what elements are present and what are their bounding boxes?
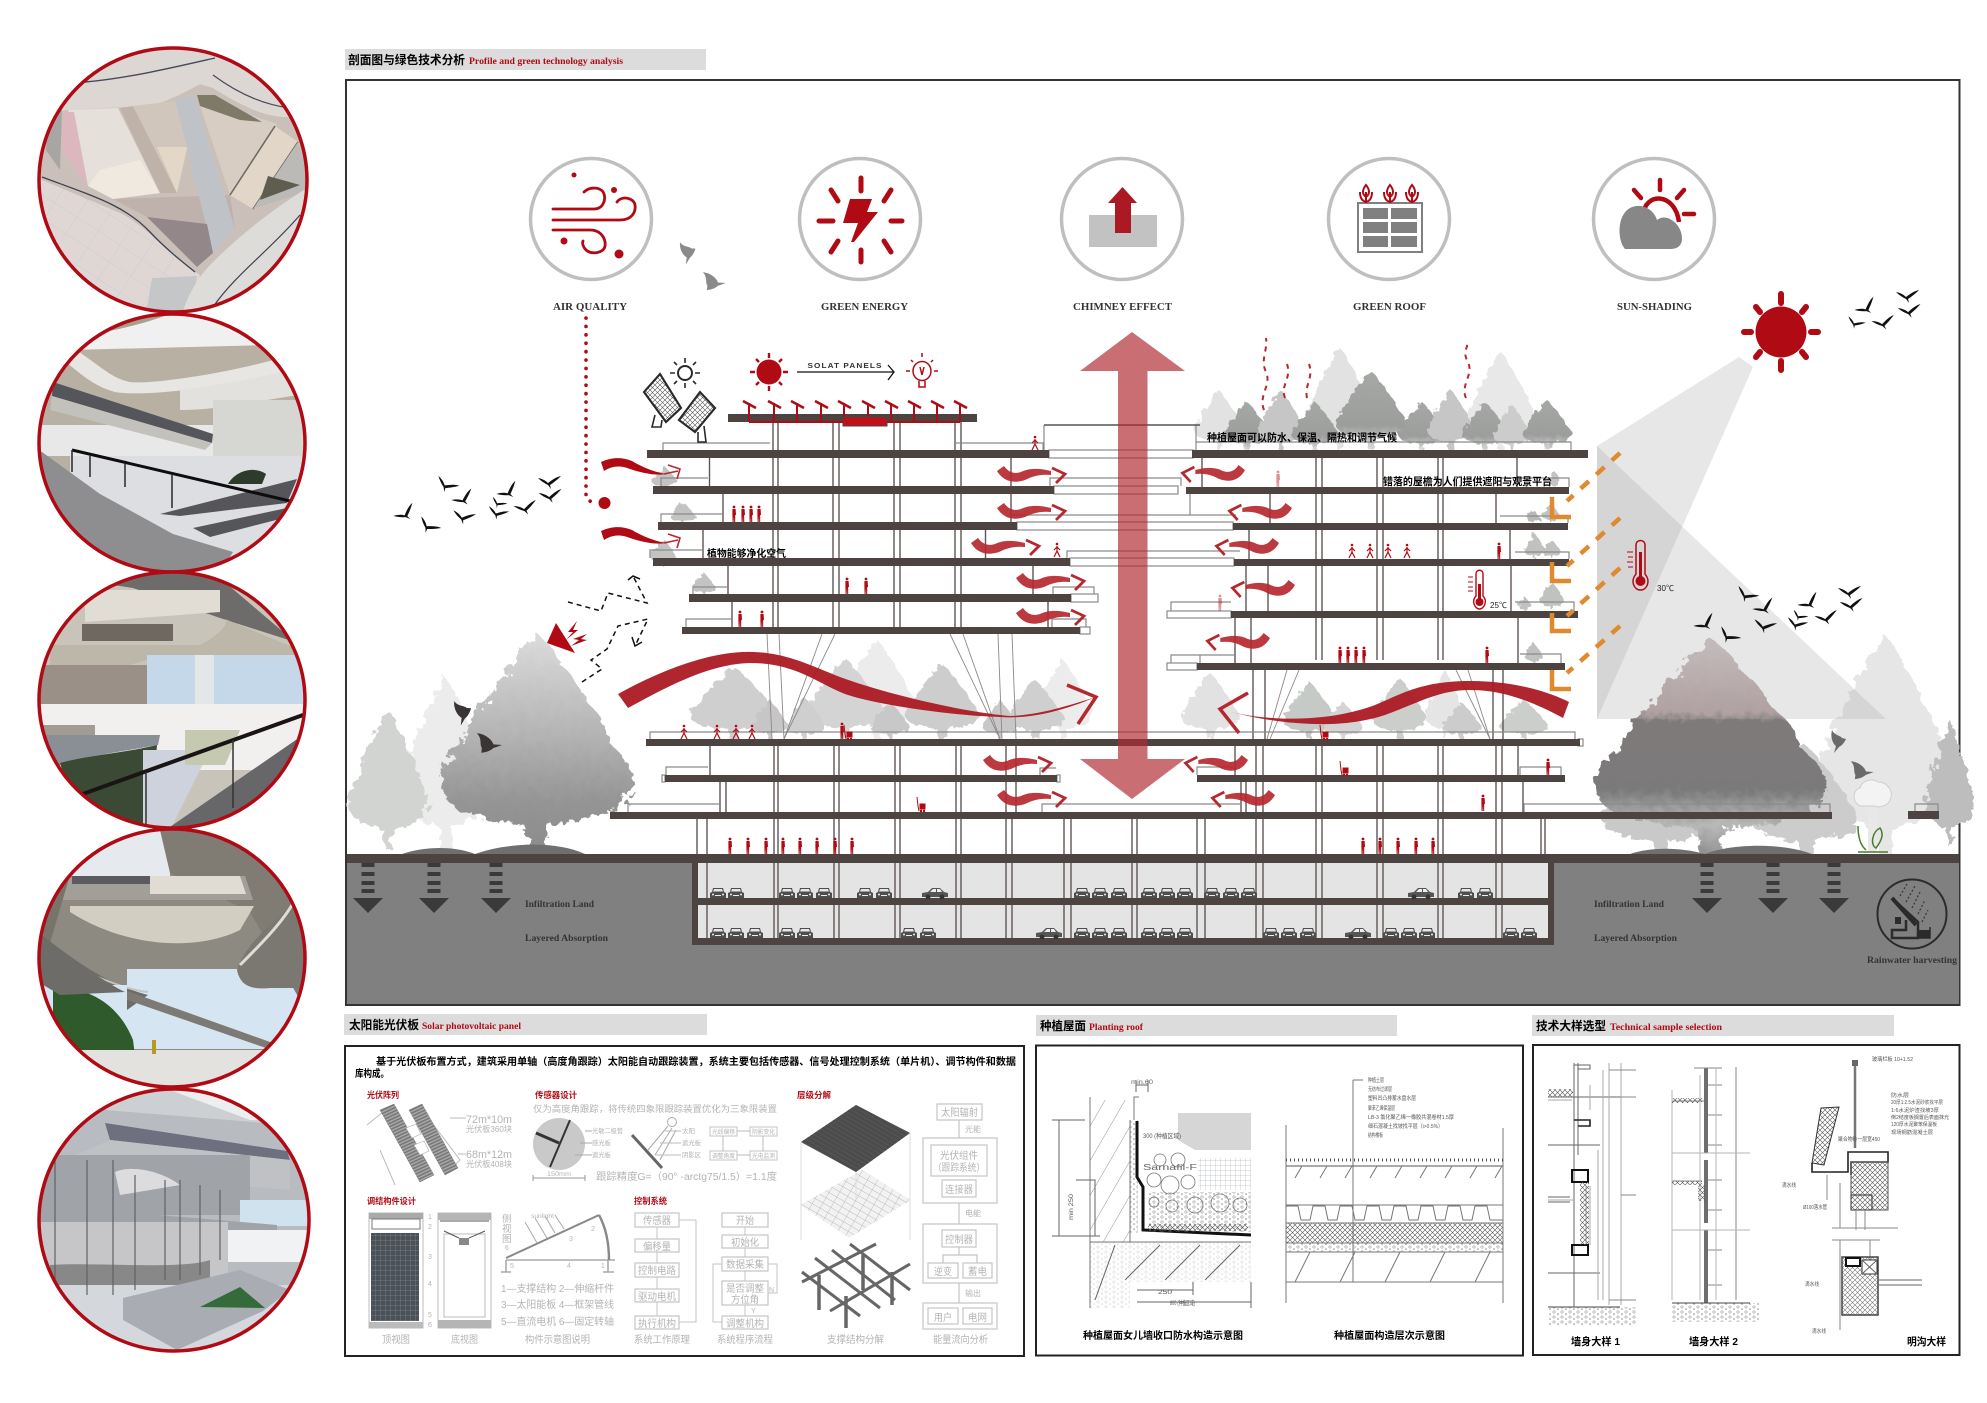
intro paragraph	[355, 1055, 1016, 1080]
solar panel captions	[382, 1333, 988, 1346]
gully detail: Ø100落水管	[1803, 1203, 1827, 1211]
chimney double arrow	[1080, 332, 1185, 799]
solar panels on roof	[743, 401, 967, 426]
sub heading: sensor design: 传感器设计	[535, 1090, 577, 1100]
solar panel captions: 能量流向分析	[933, 1333, 988, 1346]
solar panel captions: 构件示意图说明	[525, 1333, 590, 1346]
label: green energy: GREEN ENERGY	[821, 301, 908, 313]
infiltration arrows right	[1692, 863, 1849, 913]
energy flow labels	[933, 1106, 987, 1324]
section: solar panel heading: Solar photovoltaic panel	[422, 1021, 522, 1031]
dashed reflected sound arrows	[568, 576, 648, 682]
side view tracker drawing: 1	[601, 1263, 605, 1270]
sensor diagram: 感光板	[592, 1138, 611, 1147]
parapet waterproof detail: Sarnafil-F	[1143, 1163, 1197, 1172]
side view tracker drawing: 5	[510, 1263, 514, 1270]
flowchart: program flow	[713, 1213, 777, 1330]
label: rainwater harvesting: Rainwater harvesting	[1867, 956, 1957, 966]
panel part numbers: 3	[428, 1254, 432, 1261]
section: solar panel heading: 太阳能光伏板	[349, 1017, 419, 1032]
sensor note: 仅为高度角跟踪，将传统四象限跟踪装置优化为三象限装置	[533, 1103, 777, 1114]
energy flow labels: 光能	[965, 1124, 981, 1134]
panel: technical samples	[1533, 1045, 1960, 1355]
flowchart: program flow: Y	[751, 1308, 756, 1315]
technical captions: 墙身大样 1	[1571, 1335, 1620, 1348]
gully detail: 聚合物砂一层宽450	[1838, 1135, 1880, 1143]
birds: grey pigeons near icons	[679, 240, 727, 295]
floor slabs	[347, 414, 1959, 945]
component legend: 5—直流电机 6—固定转轴	[501, 1315, 614, 1328]
label: planted roof note: 种植屋面可以防水、保温、隔热和调节气候	[1207, 431, 1397, 444]
sensor diagram: 150mm	[547, 1171, 571, 1178]
photo circle 4: curved slabs and sky	[37, 828, 307, 1088]
flowchart: system principle	[635, 1213, 696, 1330]
parapet waterproof detail	[1052, 1079, 1251, 1308]
panel: section frame ground	[346, 80, 1960, 1005]
section: solar panel heading	[344, 1014, 707, 1035]
side view vertical label: 图	[502, 1234, 512, 1245]
flowchart: program flow: 开始	[736, 1214, 754, 1227]
right wind ribbon	[1220, 681, 1569, 733]
label: air quality: AIR QUALITY	[553, 301, 627, 313]
flowchart: program flow: 方位角	[731, 1293, 759, 1306]
photo circle 3: view to city	[37, 570, 307, 828]
solar panel captions: 系统程序流程	[717, 1333, 773, 1346]
icon: green roof	[1328, 158, 1450, 280]
photo circle 2: terrace with ramp	[37, 313, 307, 572]
panel part numbers: 5	[428, 1312, 432, 1319]
gully detail	[1782, 1055, 1949, 1335]
parapet waterproof detail: min 250	[1068, 1194, 1075, 1220]
energy flow labels: （跟踪系统）	[933, 1161, 985, 1174]
side view tracker drawing: 6	[505, 1245, 509, 1252]
planting roof captions	[1083, 1329, 1445, 1342]
labels: soil layers right: Layered Absorption	[1594, 934, 1678, 944]
flowchart: program flow: N	[769, 1287, 774, 1294]
planting roof layers detail	[1286, 1076, 1503, 1303]
birds: left flock	[392, 474, 563, 539]
parapet waterproof detail: min.60	[1131, 1079, 1153, 1086]
gully detail: 120厚水泥聚苯保温板	[1891, 1121, 1937, 1128]
flowchart: system principle: 偏移量	[643, 1240, 671, 1253]
side view tracker drawing: 4	[567, 1263, 571, 1270]
sub heading: pv array: 光伏阵列	[367, 1090, 399, 1100]
gully detail: 1:6水泥炉渣找坡3厚	[1891, 1107, 1939, 1114]
panel part numbers	[428, 1214, 432, 1329]
energy flow labels: 用户	[934, 1311, 952, 1324]
gully detail: 玻璃栏板 10+1.52	[1872, 1055, 1913, 1063]
tracking accuracy formula: 跟踪精度G=（90° -arctg75/1.5）=1.1度	[596, 1170, 777, 1183]
energy flow labels: 连接器	[945, 1183, 973, 1196]
component legend: 3—太阳能板 4—框架管线	[501, 1298, 614, 1311]
panel: planting roof	[1036, 1046, 1523, 1356]
label: green roof: GREEN ROOF	[1353, 301, 1426, 313]
planting roof layers detail: 种植土层	[1368, 1076, 1384, 1084]
panel part numbers: 6	[428, 1322, 432, 1329]
icon: green energy	[800, 158, 920, 280]
planting roof layers detail: 结构楼板	[1368, 1131, 1383, 1139]
gully detail: 倒2结度板搁置后表面抹光	[1891, 1114, 1949, 1121]
component legend	[501, 1282, 614, 1328]
section: technical samples heading	[1532, 1015, 1894, 1036]
solar panel captions: 底视图	[451, 1333, 478, 1346]
columns and glazing	[697, 422, 1545, 938]
labels: soil layers left: Layered Absorption	[525, 934, 609, 944]
label: air purification note: 植物能够净化空气	[707, 547, 786, 560]
flowchart: program flow: 初始化	[731, 1236, 759, 1249]
sensor diagram: 太阳	[682, 1126, 695, 1135]
photo circle 1: atrium looking down	[37, 46, 309, 313]
section: technical samples heading: 技术大样选型	[1536, 1018, 1606, 1033]
energy flow labels: 控制器	[945, 1233, 973, 1246]
gully detail: 20厚1:2.5水泥砂浆找平层	[1891, 1099, 1943, 1106]
icon: noise warning triangle	[547, 621, 587, 653]
sensor diagram: 光电监测	[752, 1152, 775, 1160]
sub heading: component design: 调结构件设计	[367, 1196, 416, 1206]
side view vertical label	[502, 1213, 512, 1245]
birds: dark pigeons	[454, 698, 1875, 784]
heading: profile and green technology	[345, 49, 706, 70]
sub heading: layered breakdown: 层级分解	[797, 1090, 831, 1100]
left wind ribbon	[618, 652, 1096, 724]
mounds at ground level	[402, 845, 1812, 854]
side view vertical label: 侧	[502, 1213, 512, 1225]
sub heading: control system: 控制系统	[634, 1196, 667, 1206]
terrace rails and stepped plates	[628, 425, 1938, 812]
planting roof layers detail: 聚苯乙烯保温层	[1368, 1104, 1395, 1112]
orange shading arrows	[1552, 453, 1620, 689]
planting roof layers detail: 细石混凝土找坡找平层（i>0.5%）	[1368, 1122, 1443, 1130]
technical captions: 明沟大样	[1907, 1335, 1946, 1348]
birds: upper right flock	[1845, 290, 1922, 332]
labels: soil layers right	[1594, 900, 1678, 944]
trees: atrium and roof planting	[650, 348, 1571, 740]
building section	[347, 414, 1959, 945]
sensor diagram: 遮光板	[592, 1150, 611, 1159]
solar panel captions: 系统工作原理	[634, 1333, 690, 1346]
component legend: 1—支撑结构 2—伸缩杆件	[501, 1282, 614, 1295]
thermometer 25 degrees: 25℃	[1490, 601, 1507, 610]
rising heat dashes	[1262, 338, 1470, 410]
side view tracker drawing: 2	[591, 1226, 595, 1233]
sun rays shading triangles	[1597, 357, 1886, 719]
energy flow chart	[923, 1104, 997, 1329]
label: staggered eaves note: 错落的屋檐为人们提供遮阳与观景平台	[1383, 475, 1552, 488]
side view tracker drawing	[501, 1213, 615, 1272]
pv array figures: 68m*12m	[466, 1149, 512, 1161]
solar panel captions: 支撑结构分解	[827, 1333, 884, 1346]
icon: rain cloud tree with sprout	[1854, 780, 1891, 852]
thermometer 30 degrees	[1627, 540, 1674, 593]
panel: solar photovoltaic	[345, 1046, 1024, 1356]
icon: chimney effect	[1062, 158, 1182, 280]
technical captions	[1571, 1335, 1946, 1348]
side view vertical label: 视	[502, 1223, 512, 1235]
flowchart: system principle: 驱动电机	[638, 1290, 676, 1303]
labels: soil layers right: Infiltration Land	[1594, 900, 1665, 910]
energy flow labels: 光伏组件	[940, 1149, 978, 1162]
gully detail: 滴水线	[1782, 1181, 1796, 1189]
thermometer 30 degrees: 30℃	[1657, 584, 1674, 593]
planting roof layers detail: 塑料凹凸排蓄水盘水层	[1368, 1094, 1416, 1102]
gully detail: 滴水线	[1812, 1327, 1826, 1335]
section: planting roof heading: Planting roof	[1089, 1022, 1144, 1032]
icon: air quality	[530, 158, 652, 280]
flowchart: program flow: 是否调整	[726, 1282, 764, 1295]
sensor diagram: 光线偏移	[712, 1128, 735, 1136]
thermometer 25 degrees	[1468, 570, 1507, 610]
technical captions: 墙身大样 2	[1689, 1335, 1738, 1348]
sensor diagram	[533, 1118, 777, 1181]
gully detail: 防水层	[1891, 1092, 1909, 1099]
icon: big sun	[1744, 294, 1818, 370]
flowchart: program flow: 调整机构	[726, 1317, 764, 1330]
sensor diagram: 阴影变化	[752, 1128, 775, 1136]
flowchart: system principle: 控制电路	[638, 1264, 676, 1277]
energy flow labels: 逆变	[934, 1265, 952, 1278]
solar energy diagram	[750, 353, 938, 391]
flowchart: system principle: 执行机构	[638, 1317, 676, 1330]
icon: sun shading	[1594, 158, 1714, 280]
gully detail: 滴水线	[1805, 1280, 1819, 1288]
parapet waterproof detail: 300 (种植区域)	[1143, 1131, 1181, 1140]
trees: large foggy landscape trees	[348, 633, 1974, 860]
section: planting roof heading	[1036, 1015, 1397, 1036]
pv array figures: 光伏板360块	[466, 1124, 512, 1134]
section: technical samples heading: Technical sample selection	[1610, 1022, 1722, 1032]
sensor diagram: 光敏二极管	[592, 1126, 623, 1135]
parapet waterproof detail: 250	[1158, 1289, 1172, 1296]
energy flow labels: 太阳辐射	[941, 1106, 978, 1119]
section: planting roof heading: 种植屋面	[1040, 1018, 1086, 1033]
panel part numbers: 1	[428, 1214, 432, 1221]
energy flow labels: 电能	[965, 1208, 981, 1218]
parapet waterproof detail: 800 (种植区域)	[1170, 1298, 1195, 1307]
dotted air quality line	[586, 318, 610, 509]
labels: soil layers left	[525, 900, 609, 944]
icon: solar panels with sun	[644, 358, 715, 442]
panel part numbers: 2	[428, 1224, 432, 1231]
energy flow labels: 输出	[965, 1288, 981, 1298]
inclined columns	[767, 634, 1490, 739]
sensor diagram: 遮光板	[682, 1138, 701, 1147]
basement	[698, 863, 1548, 938]
isometric pv layers	[800, 1105, 911, 1328]
pv array figures	[466, 1114, 512, 1169]
wall detail 1	[1548, 1063, 1636, 1325]
solar panel captions: 顶视图	[382, 1333, 410, 1346]
panel bottom view	[438, 1213, 491, 1328]
intro paragraph: 基于光伏板布置方式，建筑采用单轴（高度角跟踪）太阳能自动跟踪装置，系统主要包括传感器、信号处理控制系统（单片机）、调节构件和数据	[376, 1055, 1016, 1068]
pv array figures: 72m*10m	[466, 1114, 512, 1126]
sensor diagram: 阴影区	[682, 1150, 701, 1159]
energy flow labels: 蓄电	[968, 1265, 987, 1278]
planting roof layers detail: LB-3 氯化聚乙烯一橡胶共混卷材1.5厚	[1368, 1113, 1454, 1121]
labels: soil layers left: Infiltration Land	[525, 900, 595, 910]
pv array figures: 光伏板408块	[466, 1159, 512, 1169]
heading: profile and green technology: 剖面图与绿色技术分析	[348, 52, 465, 67]
birds: lower right flock	[1692, 584, 1864, 649]
pv array drawing	[367, 1104, 466, 1185]
planting roof captions: 种植屋面女儿墙收口防水构造示意图	[1083, 1329, 1243, 1342]
cars: basement parking	[710, 888, 1537, 939]
label: sun shading: SUN-SHADING	[1617, 301, 1692, 313]
solar energy diagram: SOLAT PANELS	[808, 361, 882, 370]
panel part numbers: 4	[428, 1281, 432, 1288]
people: red figures	[681, 436, 1550, 854]
photo circle 5: glazed gallery	[30, 1085, 320, 1360]
label: chimney effect: CHIMNEY EFFECT	[1073, 301, 1173, 313]
ventilation swirls	[971, 465, 1295, 807]
sensor diagram: 调整角度	[712, 1152, 735, 1160]
side view tracker drawing: 3	[569, 1236, 573, 1243]
flowchart: program flow: 数据采集	[726, 1258, 764, 1271]
heading: profile and green technology: Profile and green technology analysis	[469, 56, 624, 66]
infiltration arrows left	[353, 863, 511, 913]
planting roof captions: 种植屋面构造层次示意图	[1334, 1329, 1445, 1342]
flowchart: system principle: 传感器	[643, 1214, 671, 1227]
intro paragraph: 库构成。	[355, 1067, 389, 1080]
panel top view	[369, 1213, 423, 1328]
air intake arrows into planted terrace	[601, 458, 680, 548]
side view tracker drawing: sunlight	[531, 1213, 554, 1220]
planting roof layers detail: 无纺布过滤层	[1368, 1085, 1392, 1093]
wall detail 2	[1672, 1067, 1760, 1322]
energy flow labels: 电网	[968, 1311, 987, 1324]
gully detail: 现场钢筋混凝土层	[1891, 1129, 1933, 1136]
icon: rainwater harvesting	[1878, 880, 1946, 948]
